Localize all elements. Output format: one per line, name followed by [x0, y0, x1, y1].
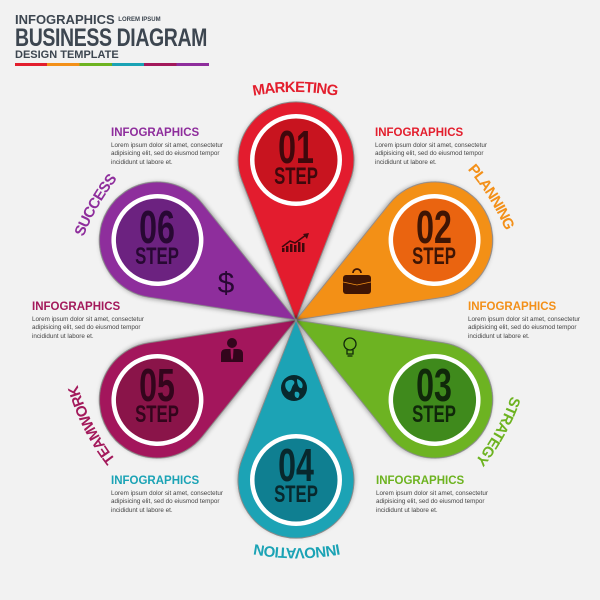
text: teamwork block (magenta, mid left): INFOGRAPHICS [32, 301, 120, 313]
text: planning block (red, top right) [375, 127, 487, 166]
step numbers [135, 122, 456, 508]
petal 4: innovation [238, 320, 354, 538]
icon: chart [282, 233, 309, 252]
petal 3: strategy [267, 270, 514, 479]
text: planning block (red, top right): adipisicing elit, sed do eiusmod tempor [375, 150, 484, 157]
text: teal block (bottom left): adipisicing elit, sed do eiusmod tempor [111, 498, 220, 505]
text: teamwork block (magenta, mid left): incididunt ut labore et. [32, 333, 94, 340]
label: success: SUCCESS [75, 174, 116, 236]
step 02: 02 [416, 202, 452, 253]
step 05 [135, 360, 179, 428]
text: planning block (red, top right): Lorem ipsum dolor sit amet, consectetur [375, 142, 487, 149]
header: color bar [15, 63, 209, 66]
step 03: 03 [416, 360, 452, 411]
petal 6: success [78, 161, 325, 370]
step 06: 06 [139, 202, 175, 253]
step 04: 04 [278, 440, 314, 491]
text: success block (purple, top left): adipisicing elit, sed do eiusmod tempor [111, 150, 220, 157]
label: strategy: STRATEGY [477, 397, 520, 468]
text: teal block (bottom left) [111, 475, 223, 514]
icon: briefcase [343, 269, 371, 294]
text: success block (purple, top left) [111, 127, 223, 166]
text: success block (purple, top left): incididunt ut labore et. [111, 159, 173, 166]
text: green block (bottom right): adipisicing elit, sed do eiusmod tempor [376, 498, 485, 505]
text: teal block (bottom left): incididunt ut labore et. [111, 507, 173, 514]
step 04: STEP [274, 481, 318, 508]
step 06: STEP [135, 243, 179, 270]
label: innovation: INNOVATION [254, 544, 340, 558]
icon: light bulb [344, 338, 356, 356]
step 05: 05 [139, 360, 175, 411]
step 06 [135, 202, 179, 270]
text: teamwork block (magenta, mid left) [32, 301, 144, 340]
step 04 [274, 440, 318, 508]
text: success block (purple, top left): Lorem ipsum dolor sit amet, consectetur [111, 142, 223, 149]
text: orange block (mid right): adipisicing elit, sed do eiusmod tempor [468, 324, 577, 331]
step 03 [412, 360, 456, 428]
header: main title: BUSINESS DIAGRAM [15, 24, 207, 52]
label: teamwork: TEAMWORK [68, 385, 114, 466]
step 02: STEP [412, 243, 456, 270]
header: infographics line: INFOGRAPHICS LOREM IPSUM [15, 12, 161, 27]
step 01: 01 [278, 122, 314, 173]
step 05: STEP [135, 401, 179, 428]
text: orange block (mid right) [468, 301, 580, 340]
text: planning block (red, top right): INFOGRAPHICS [375, 127, 463, 139]
step 01: STEP [274, 163, 318, 190]
header [15, 12, 209, 66]
text: green block (bottom right): incididunt ut labore et. [376, 507, 438, 514]
label: marketing: MARKETING [252, 82, 338, 96]
text: orange block (mid right): incididunt ut labore et. [468, 333, 530, 340]
text: green block (bottom right) [376, 475, 488, 514]
text: orange block (mid right): INFOGRAPHICS [468, 301, 556, 313]
header: subtitle: DESIGN TEMPLATE [15, 49, 119, 61]
petal 5: teamwork [78, 270, 325, 479]
petal 2: planning [267, 161, 514, 370]
text: orange block (mid right): Lorem ipsum dolor sit amet, consectetur [468, 316, 580, 323]
text: green block (bottom right): Lorem ipsum dolor sit amet, consectetur [376, 490, 488, 497]
text: green block (bottom right): INFOGRAPHICS [376, 475, 464, 487]
step 02 [412, 202, 456, 270]
text: teamwork block (magenta, mid left): Lorem ipsum dolor sit amet, consectetur [32, 316, 144, 323]
icon: dollar: $ [218, 267, 235, 300]
icon: businessman [221, 338, 243, 362]
step 01 [274, 122, 318, 190]
label: planning: PLANNING [468, 164, 514, 230]
text: planning block (red, top right): incididunt ut labore et. [375, 159, 437, 166]
text: teamwork block (magenta, mid left): adipisicing elit, sed do eiusmod tempor [32, 324, 141, 331]
text: success block (purple, top left): INFOGRAPHICS [111, 127, 199, 139]
step 03: STEP [412, 401, 456, 428]
text: teal block (bottom left): INFOGRAPHICS [111, 475, 199, 487]
text: teal block (bottom left): Lorem ipsum dolor sit amet, consectetur [111, 490, 223, 497]
icon: globe [281, 375, 307, 401]
petal 1: marketing [238, 102, 354, 320]
